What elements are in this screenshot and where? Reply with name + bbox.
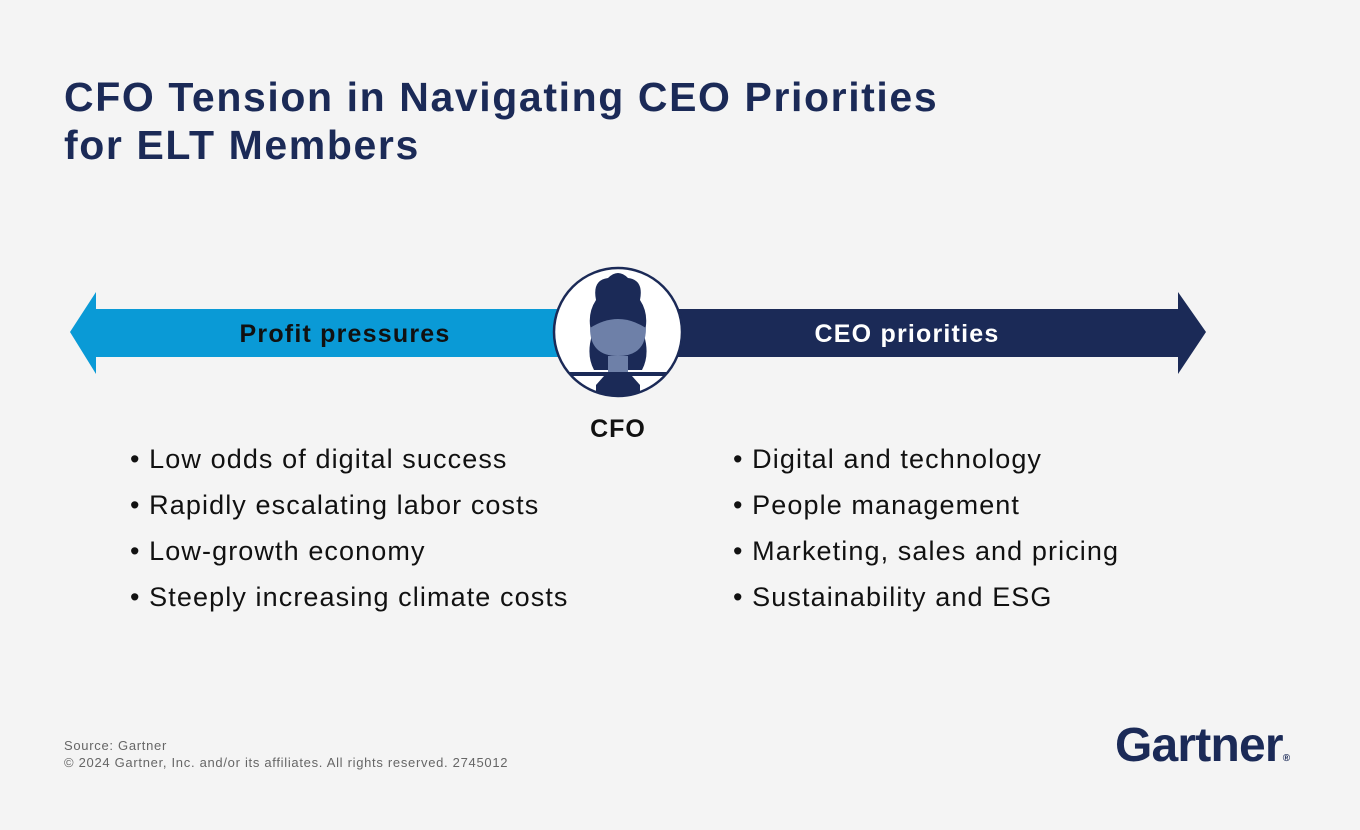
arrow: CEO priorities [620,292,1206,374]
title: CFO Tension in Navigating CEO Priorities [64,74,938,120]
list: CEO priorities: Sustainability and ESG [752,582,1053,612]
arrows diagram [70,266,1206,443]
list: CEO priorities: People management [752,490,1020,520]
title: for ELT Members [64,122,420,168]
source text [64,738,508,770]
list: CEO priorities: Marketing, sales and pricing [752,536,1119,566]
arrow: profit pressures: Profit pressures [240,320,450,348]
icon: CFO avatar [554,268,684,400]
list: profit pressures: Rapidly escalating labor costs [149,490,539,520]
list: CEO priorities: Digital and technology [752,444,1042,474]
list: profit pressures: Low-growth economy [149,536,426,566]
arrow: profit pressures [70,292,620,374]
title [64,74,938,168]
list: CEO priorities [734,444,1119,612]
source text: © 2024 Gartner, Inc. and/or its affiliates. All rights reserved. 2745012 [64,755,508,770]
list: profit pressures: Low odds of digital success [149,444,508,474]
arrow: CEO priorities: CEO priorities [815,320,999,348]
logo: Gartner: Gartner® [1115,719,1290,772]
label: CFO: CFO [590,415,646,443]
list: profit pressures [131,444,569,612]
list: profit pressures: Steeply increasing climate costs [149,582,569,612]
source text: Source: Gartner [64,738,167,753]
